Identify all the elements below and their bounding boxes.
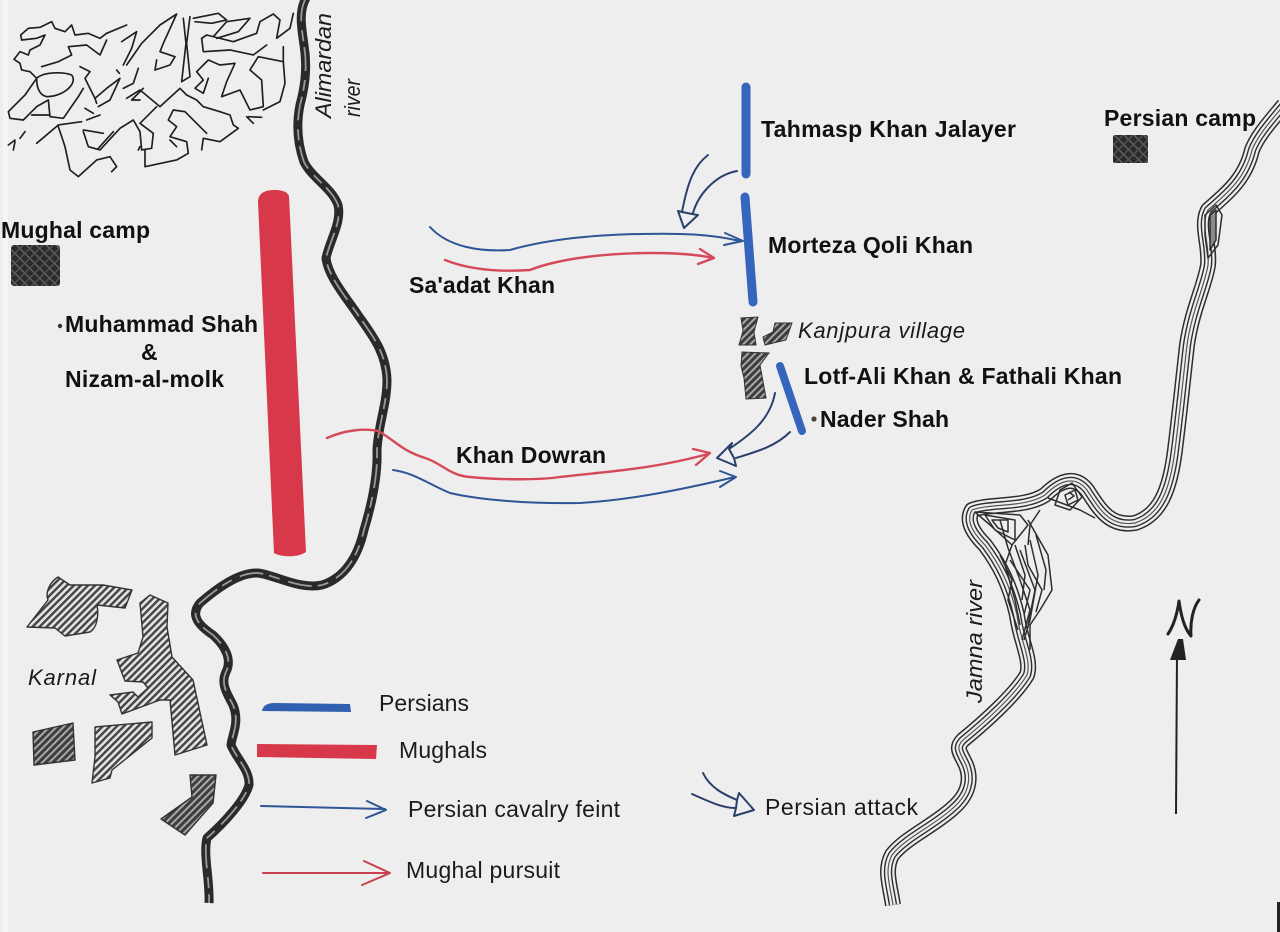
Kanjpura village bbox=[739, 317, 965, 399]
label: Lotf-Ali Khan & Fathali Khan: Lotf-Ali Khan & Fathali Khan bbox=[804, 363, 1122, 389]
Persian camp: Persian camp bbox=[1104, 105, 1256, 131]
label: Alimardan river bbox=[311, 13, 365, 120]
Persian attack arrow north bbox=[678, 155, 737, 228]
icon: Mughal camp bbox=[11, 245, 60, 286]
icon: Persian camp bbox=[1113, 135, 1148, 163]
legend: Persian cavalry feint: Persian cavalry feint bbox=[408, 796, 621, 822]
legend: Mughal pursuit bbox=[263, 857, 561, 885]
legend: Persians: Persians bbox=[379, 690, 469, 716]
label: Nader Shah: Nader Shah bbox=[820, 406, 949, 432]
north arrow bbox=[1168, 600, 1199, 814]
Persian attack arrow south bbox=[717, 393, 790, 466]
Jamna river bbox=[888, 105, 1280, 905]
legend: Mughal pursuit: Mughal pursuit bbox=[406, 857, 561, 883]
braided section bbox=[975, 205, 1222, 650]
legend: Persian attack bbox=[692, 773, 918, 820]
Mughal commanders label bbox=[58, 311, 258, 392]
Persian feint arrow north bbox=[430, 227, 743, 250]
Mughal commanders label: & bbox=[141, 339, 158, 365]
legend bbox=[257, 690, 918, 885]
Persian feint arrow south bbox=[393, 470, 736, 503]
legend: Mughals bbox=[257, 737, 487, 763]
Persian camp bbox=[1104, 105, 1256, 163]
Mughal camp bbox=[1, 217, 150, 286]
Mughal camp: Mughal camp bbox=[1, 217, 150, 243]
label: Alimardan river: Alimardan bbox=[311, 13, 336, 120]
Persian line: Tahmasp Khan Jalayer bbox=[742, 87, 750, 174]
legend: Persian attack: Persian attack bbox=[765, 794, 918, 820]
label: Jamna river: Jamna river bbox=[962, 578, 987, 704]
Khan Dowran label: Khan Dowran bbox=[456, 442, 606, 468]
label: Tahmasp Khan Jalayer: Tahmasp Khan Jalayer bbox=[761, 116, 1016, 142]
Karnal town: Karnal bbox=[28, 665, 97, 690]
Kanjpura village: Kanjpura village bbox=[798, 318, 965, 343]
legend: Persian cavalry feint bbox=[261, 796, 621, 822]
Mughal main line bbox=[258, 190, 306, 556]
Persian line: Morteza Qoli Khan bbox=[745, 197, 753, 302]
label: Alimardan river: river bbox=[340, 78, 365, 117]
label: Morteza Qoli Khan: Morteza Qoli Khan bbox=[768, 232, 973, 258]
Karnal town bbox=[27, 577, 216, 835]
mountains bbox=[8, 13, 293, 177]
legend: Mughals: Mughals bbox=[399, 737, 487, 763]
Mughal pursuit arrow north bbox=[445, 249, 714, 271]
legend: Persians bbox=[262, 690, 469, 716]
Mughal commanders label: Muhammad Shah bbox=[65, 311, 258, 337]
Persian line: Nader Shah bbox=[780, 366, 802, 431]
Mughal commanders label: Nizam-al-molk bbox=[65, 366, 224, 392]
icon: Kanjpura buildings bbox=[739, 317, 792, 399]
Mughal pursuit arrow south bbox=[327, 430, 710, 479]
Sa'adat Khan label: Sa'adat Khan bbox=[409, 272, 555, 298]
Alimardan river bbox=[196, 0, 387, 903]
